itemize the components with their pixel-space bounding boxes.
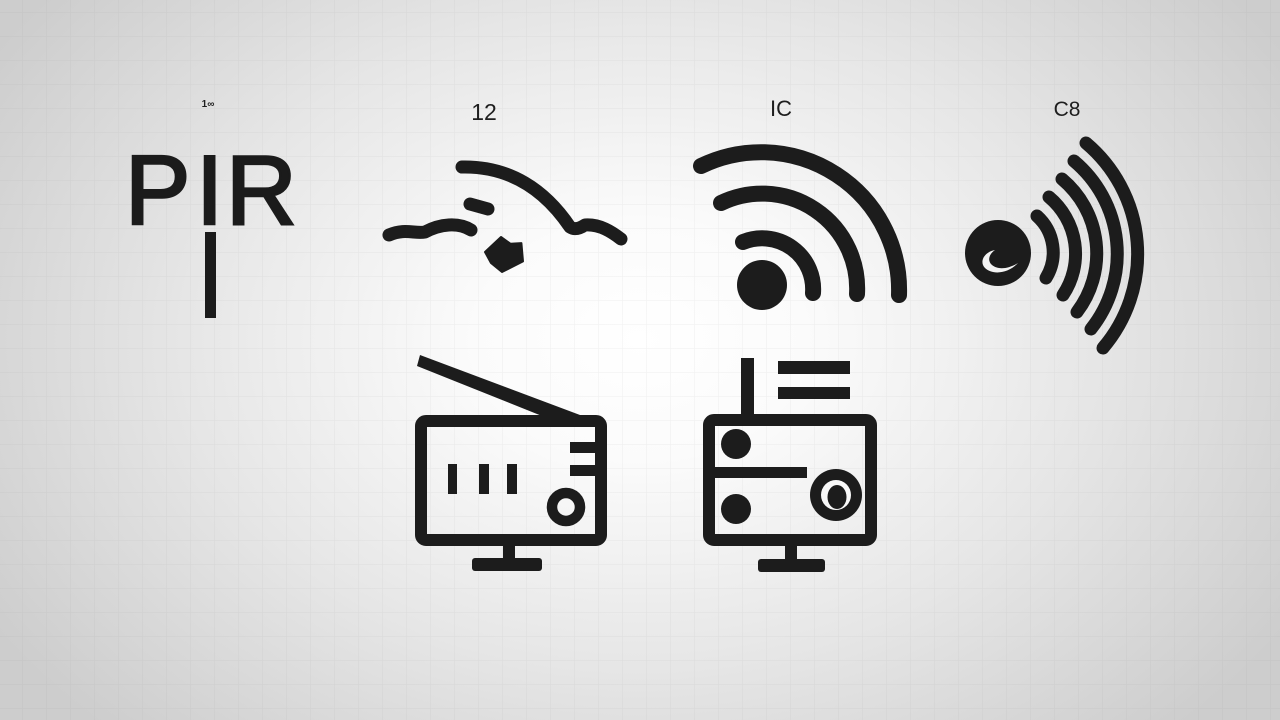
icon: radio with slanted antenna: [417, 355, 601, 571]
label 12: 12: [471, 99, 497, 125]
tiny label above PIR: 1∞: [202, 99, 214, 110]
icon: broadcast waves from circle: [965, 143, 1138, 348]
icon: PIR sensor lettering: [125, 135, 297, 318]
icon: cloud arcs with star: [389, 167, 621, 272]
label C8: C8: [1054, 98, 1080, 121]
icon: radio with vertical antenna: [709, 358, 871, 572]
label IC: IC: [770, 96, 792, 121]
icon: wifi signal with dot: [701, 152, 899, 310]
icon: PIR sensor lettering: PIR: [125, 135, 297, 245]
